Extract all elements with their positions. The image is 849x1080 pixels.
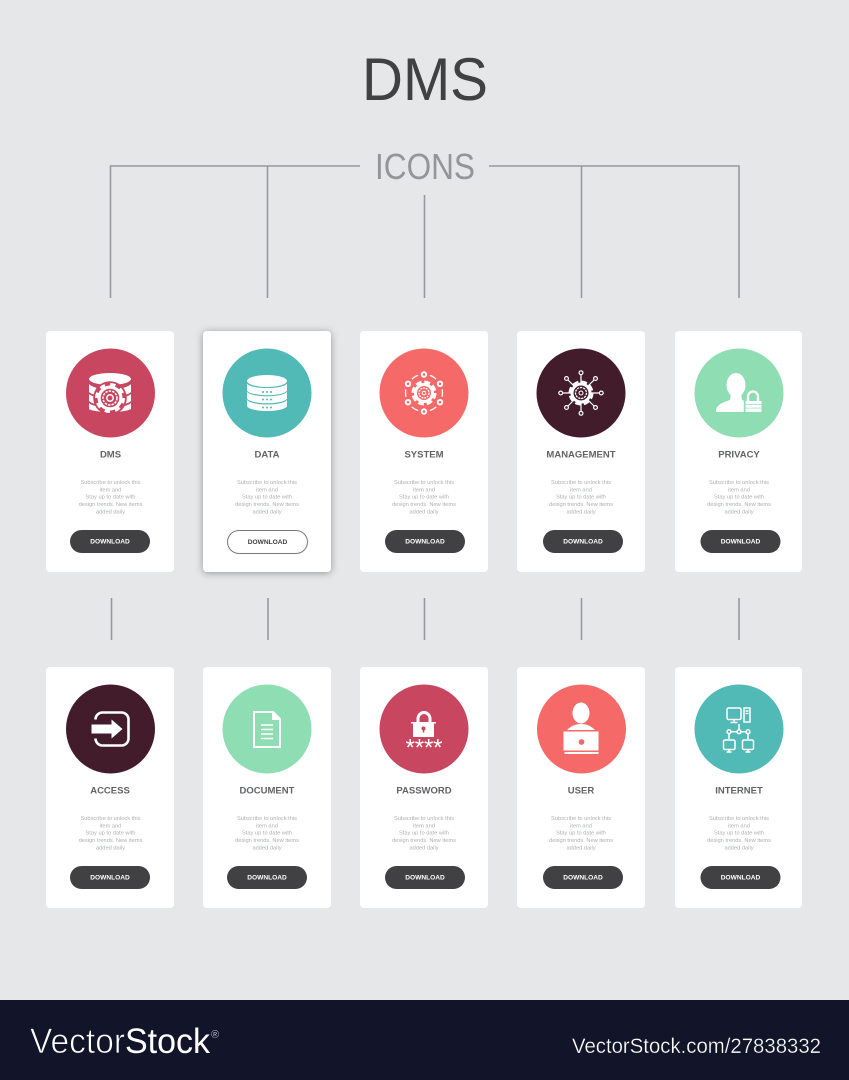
description: design trends. New items [549, 838, 613, 844]
button outlined [228, 530, 308, 554]
card: DMS [46, 331, 174, 572]
card: DATA (highlighted) [203, 331, 331, 572]
button [700, 866, 780, 889]
description: design trends. New items [235, 838, 299, 844]
description: Stay up to date with [714, 831, 764, 837]
button: DOWNLOAD [563, 874, 603, 882]
footer logo: Stock: Stock [125, 1022, 210, 1061]
description: added daily [96, 509, 125, 515]
description: item and [728, 487, 750, 493]
button: DOWNLOAD [721, 538, 761, 546]
label: DOCUMENT [240, 786, 295, 796]
footer bar [0, 1000, 849, 1080]
description: item and [413, 487, 435, 493]
description: added daily [252, 509, 282, 515]
icon: user with padlock [716, 373, 763, 414]
icon: padlock and asterisks [406, 712, 442, 762]
description: design trends. New items [707, 502, 771, 508]
label: DMS [100, 450, 121, 460]
button [385, 530, 465, 553]
description: item and [100, 487, 121, 493]
button: DOWNLOAD [405, 874, 445, 882]
button [385, 866, 465, 889]
description: item and [256, 487, 278, 493]
description: added daily [409, 845, 439, 851]
description: added daily [252, 845, 282, 851]
button: DOWNLOAD [90, 538, 130, 546]
icon: padlock and asterisks: **** [406, 734, 442, 762]
description: design trends. New items [549, 502, 613, 508]
label: PRIVACY [718, 450, 760, 460]
button: DOWNLOAD [563, 538, 603, 546]
description: Stay up to date with [399, 831, 449, 837]
description: item and [413, 823, 435, 829]
button [70, 866, 150, 889]
card: USER [517, 667, 645, 908]
icon: person at laptop [564, 702, 598, 754]
description: Subscribe to unlock this [709, 480, 769, 486]
description: item and [728, 823, 750, 829]
label: DATA [255, 450, 280, 460]
description: design trends. New items [392, 838, 456, 844]
description: Subscribe to unlock this [237, 816, 297, 822]
description: Subscribe to unlock this [551, 816, 611, 822]
icon: gear with nodes [559, 371, 603, 415]
description: Subscribe to unlock this [394, 480, 454, 486]
label: USER [568, 786, 594, 796]
description: added daily [566, 509, 596, 515]
description: design trends. New items [79, 838, 143, 844]
button [70, 530, 150, 553]
subtitle: ICONS: ICONS [375, 146, 475, 187]
description: item and [256, 823, 278, 829]
title: DMS [362, 46, 488, 113]
description: Stay up to date with [556, 831, 606, 837]
icon: computer network [724, 708, 754, 752]
description: added daily [96, 845, 125, 851]
description: item and [570, 823, 592, 829]
description: added daily [409, 509, 439, 515]
description: design trends. New items [707, 838, 771, 844]
description: Subscribe to unlock this [80, 816, 141, 822]
button [227, 866, 307, 889]
label: ACCESS [90, 786, 130, 796]
description: design trends. New items [392, 502, 456, 508]
registered mark: ® [211, 1029, 219, 1041]
label: PASSWORD [396, 786, 452, 796]
button [543, 530, 623, 553]
description: added daily [724, 509, 754, 515]
description: Stay up to date with [556, 495, 606, 501]
icon: gear network [402, 368, 446, 418]
button: DOWNLOAD [721, 874, 761, 882]
card: INTERNET [675, 667, 802, 908]
icon: document [254, 712, 280, 747]
card: DOCUMENT [203, 667, 331, 908]
description: design trends. New items [235, 502, 299, 508]
description: item and [100, 823, 121, 829]
footer id: VectorStock.com/27838332 [572, 1035, 821, 1058]
description: Subscribe to unlock this [709, 816, 769, 822]
card: PASSWORD [360, 667, 488, 908]
label: INTERNET [715, 786, 763, 796]
card: MANAGEMENT [517, 331, 645, 572]
button outlined: DOWNLOAD [248, 539, 288, 546]
description: Stay up to date with [86, 495, 135, 501]
description: Subscribe to unlock this [551, 480, 611, 486]
card: SYSTEM [360, 331, 488, 572]
icon: enter arrow [92, 712, 128, 746]
description: design trends. New items [79, 502, 143, 508]
button: DOWNLOAD [247, 874, 287, 882]
description: Stay up to date with [86, 831, 135, 837]
button [543, 866, 623, 889]
connector tree from ICONS to top row [110, 166, 739, 298]
icon: database [247, 375, 287, 411]
label: SYSTEM [404, 450, 444, 460]
card: PRIVACY [675, 331, 802, 572]
description: Stay up to date with [714, 495, 764, 501]
card: ACCESS [46, 667, 174, 908]
description: Subscribe to unlock this [394, 816, 454, 822]
button [700, 530, 780, 553]
description: added daily [724, 845, 754, 851]
description: Stay up to date with [242, 831, 292, 837]
description: Stay up to date with [399, 495, 449, 501]
description: item and [570, 487, 592, 493]
button: DOWNLOAD [405, 538, 445, 546]
description: Stay up to date with [242, 495, 292, 501]
icon: database with gear [89, 373, 131, 415]
connectors between rows [112, 598, 739, 640]
button: DOWNLOAD [90, 874, 130, 882]
footer logo: Vector: Vector [30, 1022, 125, 1061]
label: MANAGEMENT [546, 450, 616, 460]
description: Subscribe to unlock this [237, 480, 297, 486]
description: Subscribe to unlock this [80, 480, 141, 486]
description: added daily [566, 845, 596, 851]
